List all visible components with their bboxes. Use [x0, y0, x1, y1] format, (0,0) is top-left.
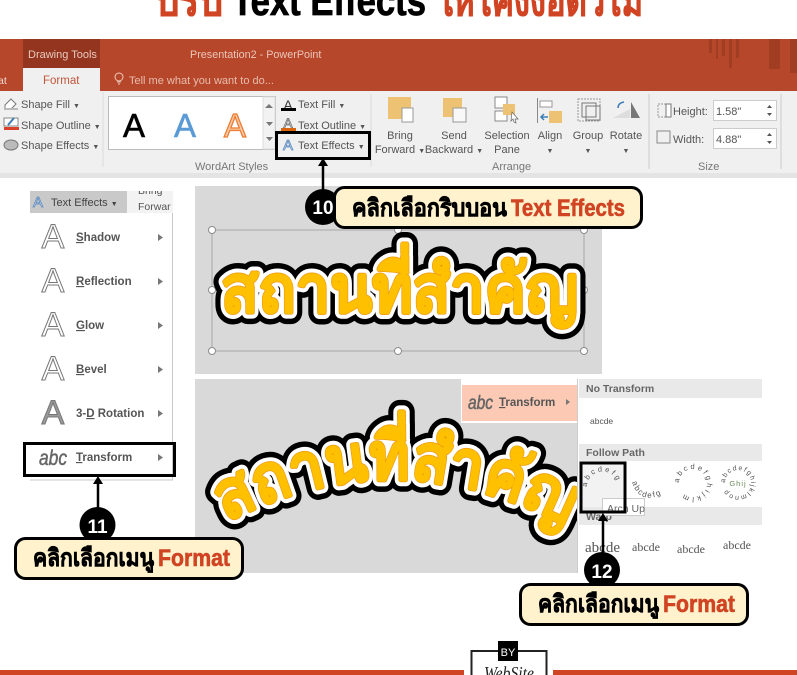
WordArt gallery: A [123, 107, 145, 144]
panel: Text Effects menu: Bring [138, 185, 163, 197]
arched WordArt text: สถานที่สำคัญ [210, 405, 577, 540]
Arrange group: ▼ [585, 148, 591, 155]
arrow: to Arch Up [598, 513, 608, 556]
callout 11 [16, 507, 242, 578]
panel: Transform menu item [461, 379, 578, 423]
WordArt text: สถานที่สำคัญ [221, 242, 578, 328]
shape commands [4, 92, 103, 167]
WordArt text commands: Text Fill ▼ [298, 99, 345, 111]
panel: PowerPoint ribbon: Format [43, 75, 80, 87]
WordArt gallery [108, 96, 276, 150]
Arrange group: Arrange [492, 161, 531, 173]
Arrange group: Rotate [610, 130, 642, 142]
callout 11: Format [158, 545, 230, 572]
callout 12: 12 [591, 562, 613, 583]
WordArt text commands: Text Outline ▼ [298, 120, 366, 132]
WordArt text commands: A [283, 97, 293, 113]
Size group: 4.88" [716, 134, 741, 146]
menu item: 3-D Rotation: A [42, 394, 65, 432]
panel: Text Effects menu: Text Effects ▼ [51, 197, 118, 209]
panel: PowerPoint ribbon: Presentation2 - PowerPoint [190, 49, 321, 61]
Arrange group: Backward ▼ [425, 144, 483, 156]
Size group: Height: [673, 106, 708, 118]
menu item: Glow [42, 306, 163, 344]
panel: Transform gallery: abcde [677, 542, 705, 556]
footer bar [0, 670, 797, 675]
callout 11: คลิกเลือกเมนู [33, 545, 155, 573]
Arrange group: Selection [484, 130, 530, 142]
panel: Transform gallery: Ghij [729, 479, 747, 488]
Arrange group: Forward ▼ [375, 144, 425, 156]
Size group: Size [698, 161, 719, 173]
Arrange group: ▼ [547, 148, 553, 155]
menu item: 3-D Rotation: 3-D Rotation [76, 408, 144, 420]
menu item: Shadow: Shadow [76, 232, 120, 244]
Arrange group: Align [538, 130, 562, 142]
panel: Transform gallery: abcde [590, 416, 613, 426]
icon: lightbulb [115, 73, 123, 84]
menu item: 3-D Rotation [42, 394, 163, 432]
Arrange group: Send [441, 130, 467, 142]
arched WordArt text: สถานที่สำคัญ [214, 410, 577, 536]
callout 10: 10 [312, 198, 334, 219]
highlight: Text Effects button [276, 132, 370, 158]
WordArt text: สถานที่สำคัญ [221, 242, 578, 328]
title [155, 0, 643, 24]
panel: Transform gallery: No Transform [586, 383, 654, 395]
panel: Transform menu item: abc [468, 393, 493, 414]
panel: PowerPoint ribbon: Drawing Tools [28, 49, 97, 61]
arrow: to Transform [93, 476, 103, 510]
panel: slide with arched WordArt [195, 379, 577, 573]
Arrange group [375, 94, 649, 173]
panel: Transform gallery: abcdefghijklm [675, 464, 712, 502]
callout 10 [305, 188, 642, 228]
arrow: to Text Effects [318, 158, 328, 190]
WordArt gallery: A [174, 107, 196, 144]
panel: PowerPoint ribbon: Tell me what you want to do... [129, 75, 274, 87]
callout 12 [520, 552, 748, 624]
panel: PowerPoint ribbon [0, 39, 797, 178]
Arrange group: Group [573, 130, 603, 142]
Arrange group: ▼ [623, 148, 629, 155]
tooltip: Arch Up [602, 498, 645, 516]
callout 11: 11 [87, 517, 108, 538]
arched WordArt text: สถานที่สำคัญ [214, 409, 577, 536]
panel: Transform gallery: abcde [723, 538, 751, 552]
menu item: Glow: Glow [76, 320, 104, 332]
panel: Transform gallery: Warp [586, 511, 612, 523]
panel: Transform gallery: abcdefg [583, 466, 620, 486]
callout 10: Text Effects [511, 195, 625, 222]
shape commands: Shape Fill ▼ [21, 99, 80, 111]
panel: Transform gallery: abcde [632, 540, 660, 554]
highlight: Arch Up [581, 463, 625, 512]
menu item: Reflection [42, 262, 163, 300]
WordArt text commands: A [283, 137, 293, 154]
Size group [657, 94, 781, 173]
Arrange group: Pane [494, 144, 520, 156]
Size group: Width: [673, 134, 704, 146]
menu item: Transform [39, 447, 163, 470]
callout 12: Format [663, 591, 735, 618]
panel: Text Effects menu: A [33, 194, 43, 211]
panel: Transform gallery: Follow Path [586, 447, 645, 459]
callout 12: คลิกเลือกเมนู [538, 591, 660, 619]
callout 10: คลิกเลือกริบบอน [352, 195, 508, 222]
panel: Transform gallery: abcdefg [632, 481, 661, 498]
panel: Text Effects menu: Forwar [138, 201, 171, 213]
menu item: Bevel: Bevel [76, 364, 107, 376]
Size group: 1.58" [716, 106, 741, 118]
panel: Transform menu item: Transform [499, 397, 555, 409]
logo: By WebSite: BY [501, 647, 516, 659]
WordArt text: สถานที่สำคัญ [221, 242, 578, 328]
menu item: Transform: abc [39, 447, 67, 470]
arched WordArt text: สถานที่สำคัญ [205, 400, 577, 546]
panel: Text Effects menu [30, 178, 180, 480]
panel: Transform gallery [577, 379, 762, 573]
tooltip: Arch Up: Arch Up [607, 503, 645, 515]
logo: By WebSite [472, 641, 546, 675]
WordArt text commands: A [283, 115, 293, 131]
shape commands: Shape Effects ▼ [21, 140, 99, 152]
menu item: Reflection: A [42, 262, 65, 300]
WordArt text commands: Text Effects ▼ [298, 140, 365, 152]
WordArt text commands [195, 94, 371, 173]
menu item: Shadow: A [42, 218, 65, 256]
menu item: Bevel: A [42, 350, 65, 388]
menu item: Shadow [42, 218, 163, 256]
Arch Up sample [581, 463, 623, 511]
menu item: Bevel [42, 350, 163, 388]
shape commands: Shape Outline ▼ [21, 120, 101, 132]
panel: Transform gallery: abcdefghijklmnop [721, 465, 756, 500]
highlight: Transform item [24, 444, 174, 476]
WordArt text commands: WordArt Styles [195, 161, 269, 173]
WordArt text: สถานที่สำคัญ [221, 242, 578, 328]
WordArt gallery: A [224, 107, 246, 144]
panel: Transform gallery: abcde [585, 540, 620, 556]
Arrange group: Bring [387, 130, 413, 142]
menu item: Glow: A [42, 306, 65, 344]
menu item: Transform: Transform [76, 452, 132, 464]
menu item: Reflection: Reflection [76, 276, 132, 288]
panel: slide with straight WordArt [195, 186, 602, 374]
